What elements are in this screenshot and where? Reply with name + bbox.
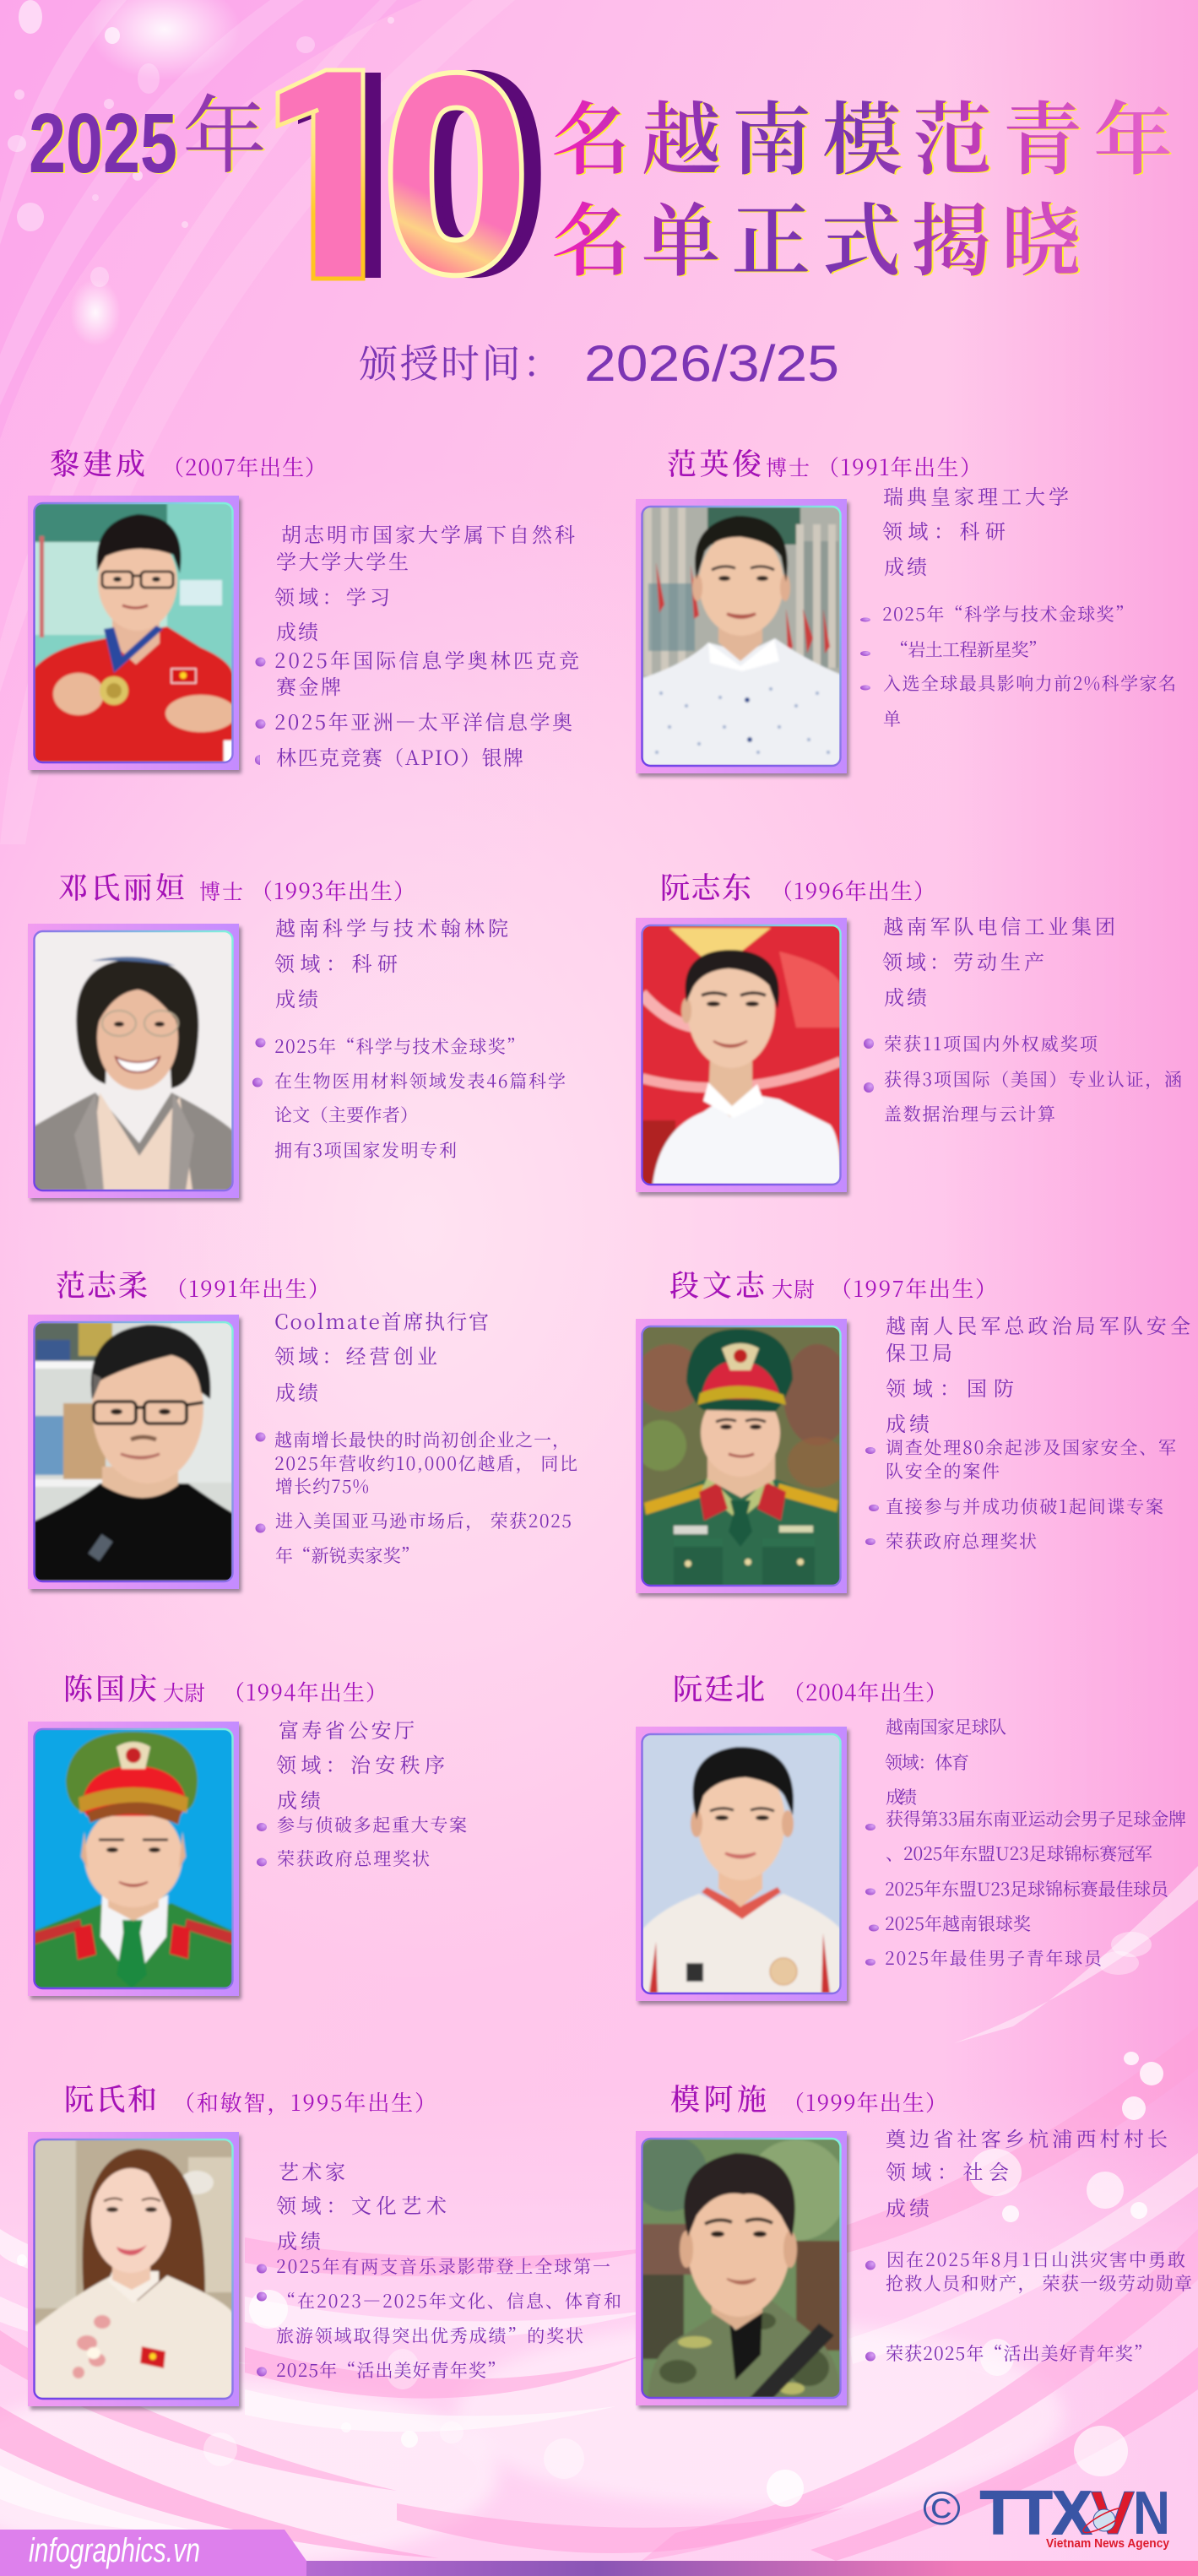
- achievements: 越南增长最快的时尚初创企业之一，: [274, 1427, 570, 1452]
- achievements: 参与侦破多起重大专案: [277, 1812, 467, 1837]
- title: 2025年: 2025: [30, 97, 179, 192]
- details: 成绩: [277, 2225, 321, 2254]
- logo: TTXVN: N: [1133, 2480, 1170, 2547]
- name: 黎建成: [50, 442, 145, 484]
- achievements: [255, 644, 579, 771]
- name: （1996年出生）: [771, 875, 935, 906]
- achievements: 进入美国亚马逊市场后， 荣获2025: [275, 1508, 572, 1533]
- name: 模阿施: [670, 2077, 767, 2119]
- achievements: [252, 1033, 566, 1163]
- photo: 邓氏丽姮: [28, 924, 241, 1201]
- details: [276, 1714, 445, 1814]
- details: [274, 1305, 489, 1406]
- details: 领域：学习: [274, 581, 390, 610]
- name: 范志柔: [56, 1263, 148, 1305]
- photo: 黎建成: [28, 496, 241, 773]
- name: （1999年出生）: [783, 2086, 947, 2118]
- photo: 阮志东: [636, 918, 849, 1196]
- details: 领域：体育: [885, 1749, 969, 1775]
- achievements: 2025年营收约10,000亿越盾， 同比: [274, 1451, 577, 1476]
- details: 瑞典皇家理工大学: [883, 480, 1069, 510]
- achievements: 荣获政府总理奖状: [886, 1528, 1037, 1554]
- details: 领域：文化艺术: [276, 2189, 447, 2219]
- title: main heading: [551, 97, 1174, 287]
- title: main heading: 名越南模范青年: [553, 98, 1174, 186]
- achievements: 2025年东盟U23足球锦标赛最佳球员: [885, 1876, 1170, 1901]
- achievements: [257, 1812, 467, 1871]
- name: 阮廷北: [673, 1667, 765, 1709]
- name: [669, 1263, 997, 1305]
- details: 领域：治安秩序: [276, 1749, 445, 1778]
- panel: 段文志: [636, 1263, 1190, 1597]
- name: （1991年出生）: [817, 451, 982, 482]
- achievements: [860, 601, 1176, 731]
- name: （1997年出生）: [830, 1272, 997, 1304]
- achievements: 入选全球最具影响力前2%科学家名: [883, 670, 1176, 696]
- award date: 颁授时间：: [359, 343, 561, 386]
- logo: TTXVN: Vietnam News Agency: [1046, 2536, 1170, 2551]
- footer bar: [0, 2530, 1198, 2576]
- details: 成绩: [884, 550, 927, 580]
- site label: infographics.vn: [29, 2532, 200, 2569]
- title: 2025年: 年: [184, 91, 268, 185]
- details: [276, 2156, 447, 2254]
- achievements: 荣获政府总理奖状: [277, 1846, 430, 1871]
- title: main heading: 名越南模范青年: [551, 97, 1173, 185]
- details: 领域：科研: [882, 515, 1006, 545]
- achievements: 单: [883, 706, 901, 731]
- name: （2004年出生）: [783, 1676, 947, 1707]
- title: big number 10: 1: [236, 25, 415, 339]
- details: 成绩: [884, 981, 927, 1011]
- achievements: 拥有3项国家发明专利: [274, 1137, 457, 1163]
- details: [885, 1714, 1006, 1809]
- name: （2007年出生）: [162, 451, 327, 482]
- details: 胡志明市国家大学属下自然科: [281, 518, 575, 548]
- name: [64, 2077, 436, 2119]
- achievements: 2025年国际信息学奥林匹克竞: [274, 644, 579, 674]
- details: 越南人民军总政治局军队安全: [886, 1310, 1190, 1339]
- achievements: 荣获2025年“活出美好青年奖”: [886, 2340, 1152, 2366]
- details: 成绩: [275, 983, 318, 1012]
- photo: 模阿施: [632, 2131, 849, 2409]
- photo: 阮氏和: [28, 2132, 241, 2410]
- logo: TTXVN: ©: [923, 2481, 961, 2535]
- achievements: “岩土工程新星奖”: [891, 637, 1046, 662]
- title: big number 10: [275, 68, 541, 280]
- award date: [359, 335, 839, 392]
- panel: 范志柔: [28, 1263, 577, 1592]
- achievements: [255, 1427, 577, 1568]
- photo: 段文志: [636, 1319, 851, 1597]
- name: [667, 442, 982, 484]
- details: 领域：经营创业: [274, 1340, 437, 1369]
- details: 成绩: [275, 1376, 318, 1406]
- achievements: [864, 1031, 1182, 1126]
- details: 成绩: [276, 616, 318, 645]
- achievements: 2025年有两支音乐录影带登上全球第一: [276, 2253, 610, 2279]
- details: 成绩: [886, 1784, 917, 1809]
- name: 阮志东: [660, 865, 752, 908]
- panel: 阮廷北: [636, 1667, 1186, 2004]
- achievements: [865, 1806, 1186, 1971]
- panel: 邓氏丽姮: [28, 865, 566, 1201]
- achievements: 荣获11项国内外权威奖项: [884, 1031, 1098, 1056]
- achievements: 旅游领域取得突出优秀成绩”的奖状: [276, 2323, 583, 2348]
- achievements: 调查处理80余起涉及国家安全、军: [886, 1434, 1176, 1460]
- details: 领域：科研: [274, 947, 398, 977]
- achievements: 论文（主要作者）: [274, 1102, 418, 1127]
- achievements: 抢救人员和财产， 荣获一级劳动勋章: [886, 2270, 1192, 2296]
- achievements: 年“新锐卖家奖”: [275, 1543, 419, 1568]
- achievements: 、2025年东盟U23足球锦标赛冠军: [886, 1841, 1152, 1866]
- achievements: 队安全的案件: [886, 1458, 1000, 1483]
- panel: 模阿施: [632, 2077, 1192, 2409]
- name: 博士: [766, 452, 810, 482]
- logo: TTXVN: V: [1091, 2480, 1135, 2547]
- photo: 阮廷北: [636, 1727, 849, 2004]
- details: 保卫局: [886, 1337, 952, 1366]
- name: 陈国庆: [63, 1667, 157, 1709]
- achievements: [865, 1434, 1176, 1554]
- details: 富寿省公安厅: [279, 1714, 415, 1744]
- name: （1993年出生）: [251, 875, 415, 906]
- name: [660, 865, 935, 908]
- achievements: 赛金牌: [276, 670, 341, 700]
- panel: 阮志东: [636, 865, 1182, 1196]
- details: 越南国家足球队: [886, 1714, 1006, 1739]
- name: （1994年出生）: [223, 1676, 388, 1707]
- details: 领域：劳动生产: [882, 946, 1044, 975]
- achievements: 2025年越南银球奖: [885, 1911, 1031, 1936]
- details: [882, 480, 1069, 580]
- photo: 范志柔: [28, 1315, 241, 1592]
- name: [673, 1667, 947, 1709]
- name: 大尉: [772, 1273, 815, 1304]
- details: 成绩: [886, 2192, 930, 2221]
- name: 大尉: [163, 1677, 205, 1707]
- logo: TTXVN: TTX: [980, 2480, 1092, 2547]
- name: 范英俊: [667, 442, 762, 484]
- achievements: 林匹克竞赛（APIO）银牌: [276, 741, 523, 771]
- achievements: 2025年最佳男子青年球员: [885, 1945, 1103, 1971]
- panel: 范英俊: [636, 442, 1176, 777]
- title: big number 10: 0: [399, 19, 547, 330]
- name: （1991年出生）: [165, 1272, 330, 1304]
- title: main heading: 名单正式揭晓: [551, 198, 1081, 286]
- achievements: [257, 2253, 621, 2383]
- details: 领域：国防: [886, 1372, 1014, 1402]
- achievements: 盖数据治理与云计算: [884, 1101, 1055, 1126]
- title: main heading: 名单正式揭晓: [553, 199, 1082, 287]
- panel: 黎建成: [28, 442, 579, 773]
- achievements: 直接参与并成功侦破1起间谍专案: [886, 1494, 1163, 1519]
- title: 2025年: 年: [182, 90, 267, 184]
- name: 段文志: [669, 1263, 767, 1305]
- details: [274, 912, 508, 1012]
- achievements: 2025年“活出美好青年奖”: [276, 2357, 505, 2383]
- details: 越南科学与技术翰林院: [275, 912, 508, 941]
- panel: 阮氏和: [28, 2077, 621, 2410]
- details: 成绩: [277, 1784, 321, 1814]
- name: 邓氏丽姮: [58, 865, 185, 908]
- achievements: 2025年亚洲—太平洋信息学奥: [274, 706, 572, 735]
- logo: TTXVN: [923, 2480, 1170, 2551]
- achievements: 获得第33届东南亚运动会男子足球金牌: [886, 1806, 1186, 1831]
- name: 阮氏和: [64, 2077, 157, 2119]
- award date: 2026/3/25: [584, 335, 839, 392]
- name: [56, 1263, 330, 1305]
- achievements: 增长约75%: [275, 1473, 369, 1499]
- details: [886, 1310, 1190, 1437]
- achievements: 获得3项国际（美国）专业认证，涵: [884, 1066, 1182, 1092]
- name: [50, 442, 327, 484]
- achievements: “在2023—2025年文化、信息、体育和: [278, 2288, 621, 2313]
- name: （和敏智，1995年出生）: [173, 2086, 436, 2118]
- name: 博士: [199, 876, 243, 906]
- details: 成绩: [886, 1407, 930, 1437]
- title: 2025年: 2025: [29, 96, 177, 191]
- details: Coolmate首席执行官: [274, 1305, 489, 1335]
- details: [882, 910, 1115, 1011]
- achievements: 因在2025年8月1日山洪灾害中勇敢: [886, 2247, 1185, 2272]
- panel: 陈国庆: [28, 1667, 467, 1999]
- achievements: 2025年“科学与技术金球奖”: [882, 601, 1133, 626]
- achievements: 2025年“科学与技术金球奖”: [274, 1033, 524, 1059]
- details: 艺术家: [279, 2156, 345, 2185]
- achievements: [865, 2247, 1192, 2366]
- details: 越南军队电信工业集团: [883, 910, 1115, 940]
- details: 领域：社会: [886, 2156, 1009, 2185]
- name: [58, 865, 415, 908]
- details: [886, 2123, 1168, 2221]
- name: [63, 1667, 388, 1709]
- photo: 范英俊: [636, 499, 849, 777]
- achievements: 在生物医用材料领域发表46篇科学: [274, 1068, 566, 1093]
- details: 学大学大学生: [276, 545, 409, 575]
- name: [670, 2077, 947, 2119]
- details: [274, 518, 575, 645]
- photo: 陈国庆: [28, 1722, 241, 1999]
- details: 奠边省社客乡杭浦西村村长: [886, 2123, 1168, 2152]
- title: big number 10: 0: [382, 19, 530, 330]
